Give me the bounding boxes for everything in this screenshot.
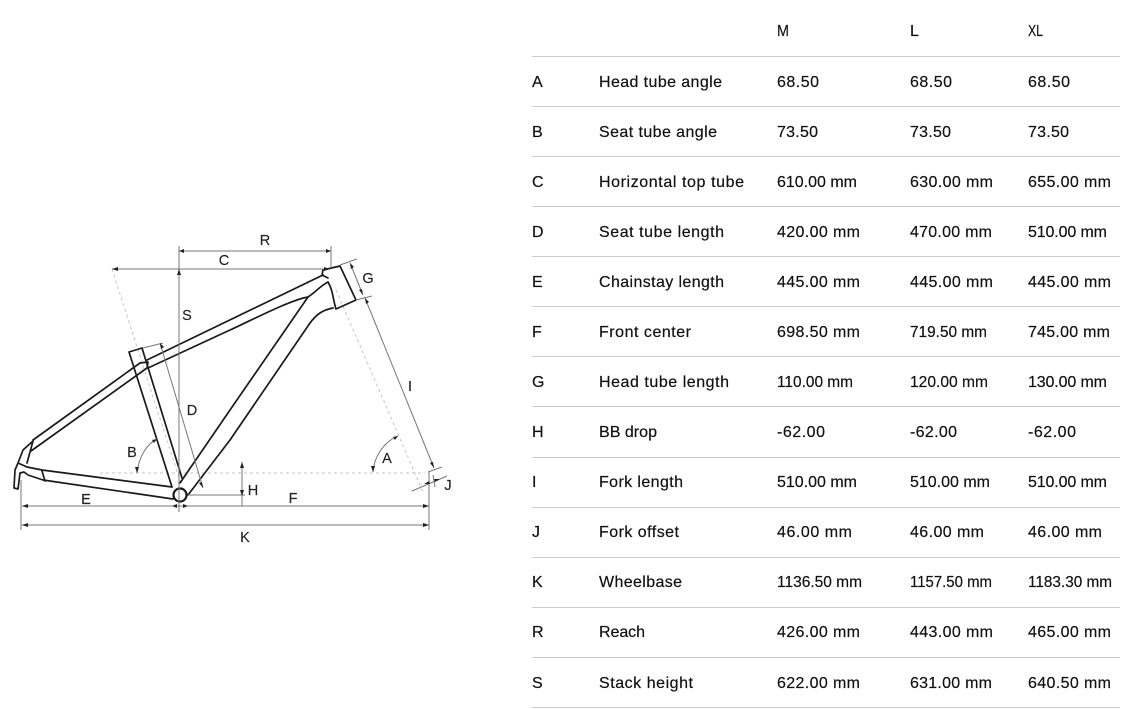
dimension lines	[21, 246, 447, 530]
dimension letters: C	[219, 253, 229, 269]
row B: 73.50	[1028, 124, 1069, 141]
row C: 630.00 mm	[910, 174, 993, 191]
dimension letters	[81, 233, 452, 546]
row C: 655.00 mm	[1028, 174, 1111, 191]
row G: Head tube length	[599, 374, 729, 391]
row C: Horizontal top tube	[599, 174, 744, 191]
row D: Seat tube length	[599, 224, 724, 241]
row E: Chainstay length	[599, 274, 724, 291]
dimension letters: B	[127, 445, 137, 461]
dimension letters: E	[81, 492, 91, 508]
row H: -62.00	[1028, 424, 1076, 441]
row J: J	[532, 524, 540, 541]
row J: 46.00 mm	[1028, 524, 1102, 541]
row J: 46.00 mm	[777, 524, 852, 541]
bottom bracket	[174, 488, 186, 502]
size header: M	[777, 23, 789, 40]
row I: 510.00 mm	[1028, 474, 1107, 491]
size header: L	[910, 23, 919, 40]
bike frame outline	[14, 266, 356, 499]
row D: 470.00 mm	[910, 224, 992, 241]
row K: 1136.50 mm	[777, 574, 862, 591]
row H	[532, 424, 1076, 441]
row K: 1183.30 mm	[1028, 574, 1112, 591]
row E: 445.00 mm	[910, 274, 993, 291]
row I: 510.00 mm	[777, 474, 857, 491]
row F: F	[532, 324, 542, 341]
row J	[532, 524, 1102, 541]
dimension letters: R	[260, 233, 270, 249]
row F: 745.00 mm	[1028, 324, 1110, 341]
row R: Reach	[599, 624, 645, 641]
row G: G	[532, 374, 544, 391]
row H: BB drop	[599, 424, 657, 441]
row E: E	[532, 274, 543, 291]
dimension letters: J	[444, 478, 452, 494]
row R: R	[532, 624, 544, 641]
row J: Fork offset	[599, 524, 680, 541]
row H: -62.00	[777, 424, 825, 441]
row D	[532, 224, 1107, 241]
row G: 120.00 mm	[910, 374, 988, 391]
row K	[532, 574, 1112, 591]
dimension arrows	[22, 249, 440, 527]
row C	[532, 174, 1111, 191]
row R: 443.00 mm	[910, 624, 993, 641]
dimension letters: F	[289, 491, 298, 507]
row A: 68.50	[1028, 74, 1070, 91]
row D: D	[532, 224, 544, 241]
row S: 631.00 mm	[910, 675, 992, 692]
row S: 640.50 mm	[1028, 675, 1111, 692]
row C: C	[532, 174, 544, 191]
row B: B	[532, 124, 543, 141]
row E	[532, 274, 1111, 291]
row S: 622.00 mm	[777, 675, 860, 692]
row C: 610.00 mm	[777, 174, 857, 191]
row A: Head tube angle	[599, 74, 722, 91]
row G: 110.00 mm	[777, 374, 853, 391]
row A: 68.50	[910, 74, 952, 91]
row B	[532, 124, 1069, 141]
dimension letters: S	[182, 308, 192, 324]
dimension letters: G	[362, 271, 374, 287]
row B: Seat tube angle	[599, 124, 717, 141]
dimension letters: I	[408, 379, 412, 395]
row F: 698.50 mm	[777, 324, 860, 341]
row J: 46.00 mm	[910, 524, 984, 541]
row R	[532, 624, 1111, 641]
row D: 420.00 mm	[777, 224, 860, 241]
row R: 465.00 mm	[1028, 624, 1111, 641]
dimension letters: A	[382, 451, 392, 467]
geometry table	[532, 23, 1120, 708]
dimension letters: K	[240, 530, 250, 546]
row A: 68.50	[777, 74, 819, 91]
row H: H	[532, 424, 544, 441]
row H: -62.00	[910, 424, 957, 441]
row K: K	[532, 574, 543, 591]
row A	[532, 74, 1070, 91]
dimension letters: D	[187, 403, 197, 419]
row F: Front center	[599, 324, 692, 341]
row B: 73.50	[777, 124, 818, 141]
row R: 426.00 mm	[777, 624, 860, 641]
row I: 510.00 mm	[910, 474, 990, 491]
row G	[532, 374, 1107, 391]
table rules	[532, 56, 1120, 708]
frame geometry diagram	[14, 233, 452, 546]
row E: 445.00 mm	[1028, 274, 1111, 291]
row D: 510.00 mm	[1028, 224, 1107, 241]
row F	[532, 324, 1110, 341]
row I: Fork length	[599, 474, 683, 491]
size header	[777, 23, 1043, 40]
row K: 1157.50 mm	[910, 574, 992, 591]
row E: 445.00 mm	[777, 274, 860, 291]
row I	[532, 474, 1107, 491]
row S	[532, 675, 1111, 692]
reference dashed lines	[100, 269, 425, 492]
row S: Stack height	[599, 675, 694, 692]
size header: XL	[1028, 23, 1043, 40]
row F: 719.50 mm	[910, 324, 987, 341]
row I: I	[532, 474, 536, 491]
row A: A	[532, 74, 543, 91]
row S: S	[532, 675, 543, 692]
row B: 73.50	[910, 124, 951, 141]
row G: 130.00 mm	[1028, 374, 1107, 391]
row K: Wheelbase	[599, 574, 682, 591]
dimension letters: H	[248, 483, 258, 499]
